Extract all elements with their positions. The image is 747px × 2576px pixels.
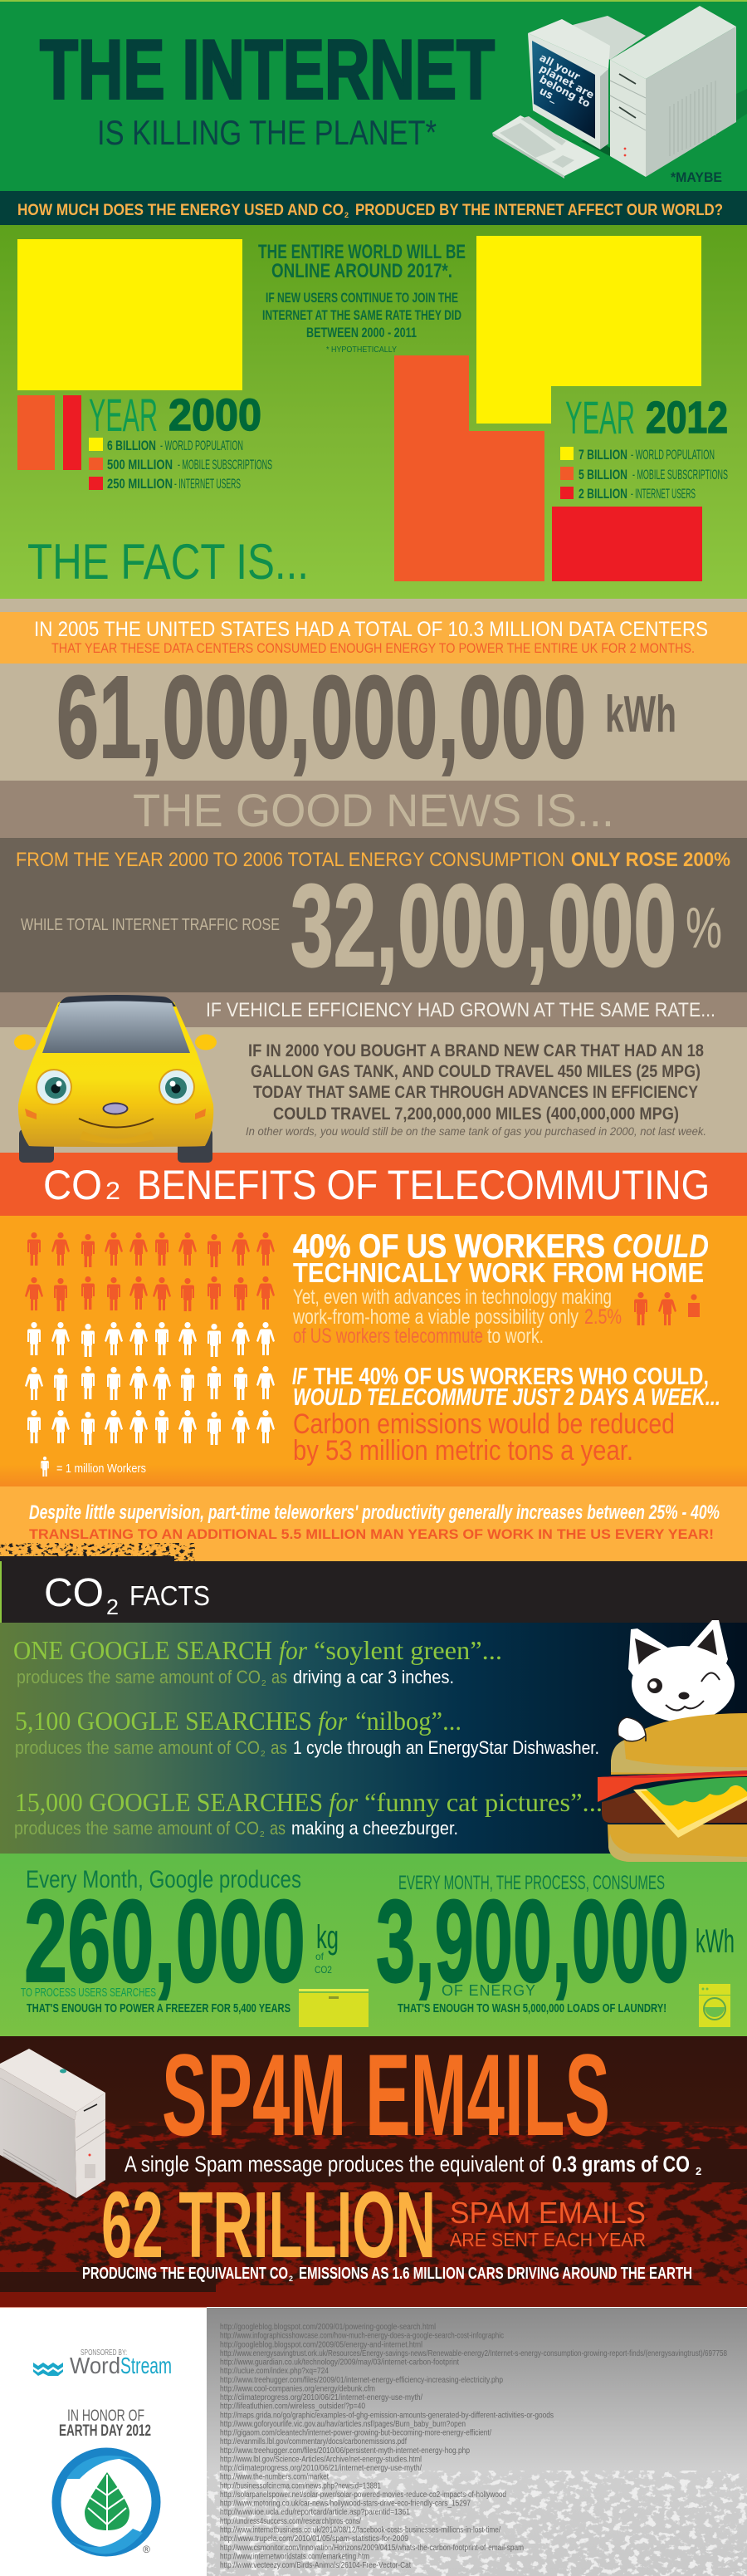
big number: 260,000 kg: kg [316, 1919, 339, 1956]
fact: soylent green: “soylent green”... [314, 1635, 502, 1665]
heading: if workers telecommute: IF [292, 1364, 308, 1390]
text block: only 2.5 percent telecommute: to work. [487, 1325, 544, 1348]
heading: 40 percent could work from home [293, 1228, 709, 1288]
panel: google monthly stats: TO PROCESS USERS SEARCHES [21, 1986, 156, 2000]
text block: entire world online: INTERNET AT THE SAME RATE THEY DID [262, 307, 461, 323]
panel: energy vs traffic: WHILE TOTAL INTERNET TRAFFIC ROSE [21, 916, 280, 934]
panel: energy vs traffic: ONLY ROSE 200% [571, 849, 730, 871]
heading: the good news is: THE GOOD NEWS IS... [133, 784, 614, 836]
chart: year 2000 squares [17, 239, 242, 470]
heading: 40 percent could work from home: 40% OF US WORKERS [293, 1228, 605, 1265]
big number: 62 trillion: 62 TRILLION [101, 2172, 436, 2277]
panel: car efficiency text: In other words, you would still be on the same tank of gas you purchased in 2000, not last week. [246, 1124, 706, 1138]
legend: year 2000: 500 MILLION [107, 457, 173, 473]
fact: nilbog: “nilbog”... [355, 1706, 461, 1736]
text block: source urls: http://www.internetworldstats.com/emarketing.htm [220, 2552, 369, 2561]
heading: 40 percent could work from home: TECHNICALLY WORK FROM HOME [293, 1257, 704, 1288]
fact: soylent green: 2 [261, 1679, 266, 1688]
footnote: maybe: *MAYBE [671, 169, 722, 185]
text block: source urls: http://www.lbl.gov/Science-Articles/Archive/net-energy-studies.html [220, 2455, 422, 2465]
text block: source urls: http://evanmills.lbl.gov/commentary/docs/carbonemissions.pdf [220, 2437, 407, 2446]
fact: nilbog [15, 1706, 599, 1759]
big number: 260,000 kg: of [315, 1951, 325, 1962]
panel: google monthly stats: THAT'S ENOUGH TO POWER A FREEZER FOR 5,400 YEARS [27, 2001, 290, 2015]
text block: entire world online: THE ENTIRE WORLD WILL BE [258, 241, 466, 263]
big number: kWh: kWh [605, 686, 676, 743]
fact: nilbog: for [318, 1706, 348, 1736]
text block: equivalent emissions: 2 [289, 2275, 293, 2283]
text block: single spam message: 0.3 grams of CO [552, 2152, 690, 2177]
text block: carbon emissions reduced [293, 1408, 675, 1467]
fact: funny cat pictures: “funny cat pictures”... [364, 1787, 603, 1817]
fact: funny cat pictures: produces the same amount of CO [14, 1818, 259, 1839]
title: THE INTERNET [40, 23, 495, 116]
heading: co2 facts [0, 1561, 747, 1623]
text block: spam emails sent each year [450, 2196, 646, 2250]
text block: only 2.5 percent telecommute [292, 1286, 622, 1348]
question banner [0, 191, 747, 225]
text block: entire world online [258, 241, 466, 355]
panel: productivity [0, 1486, 747, 1561]
text block: source urls: http://maps.grida.no/go/graphic/examples-of-ghg-emission-amounts-generated-by-different-activities-or-goods [220, 2411, 554, 2420]
panel: sponsor [0, 2308, 207, 2576]
text block: single spam message: 2 [696, 2165, 701, 2177]
text block: source urls: http://www.trupela.com/2010/01/05/spam-statistics-for-2009 [220, 2534, 408, 2544]
panel: google search facts [0, 1623, 747, 1854]
text block: source urls: http://solarpanelspower.net/solar-pwer/solar-powered-movies-reduce-co2-impacts-of-hollywood [220, 2490, 506, 2500]
illustration: smiling yellow car [14, 995, 217, 1163]
logo: earth day leaf: ® [143, 2544, 150, 2555]
text block: single spam message: A single Spam message produces the equivalent of [124, 2152, 544, 2177]
text block: source urls: http://gigaom.com/cleantech/internet-power-growing-but-becoming-more-energy-efficient/ [220, 2429, 491, 2438]
fact: funny cat pictures: making a cheezburger. [291, 1818, 458, 1839]
legend: year 2012: 5 BILLION [579, 467, 627, 482]
fact: nilbog: 1 cycle through an EnergyStar Dishwasher. [293, 1737, 599, 1758]
heading: year 2012: YEAR [565, 391, 635, 443]
illustration: server tower [0, 2049, 105, 2198]
panel: google monthly stats: OF ENERGY [442, 1982, 535, 1999]
panel: car efficiency text [0, 1027, 747, 1153]
text block: spam emails sent each year: ARE SENT EACH YEAR [450, 2229, 646, 2250]
text block: entire world online: BETWEEN 2000 - 2011 [306, 325, 417, 340]
legend: one million workers: = 1 million Workers [56, 1462, 146, 1476]
icon: desktop computer: planet are [538, 61, 597, 101]
pictogram: orange workers [25, 1232, 275, 1311]
heading: co2 facts: 2 [106, 1594, 119, 1619]
legend: one million workers [41, 1457, 146, 1477]
legend: year 2000: - MOBILE SUBSCRIPTIONS [178, 457, 272, 473]
callout: data centers banner [0, 612, 747, 664]
legend: year 2012 [560, 447, 728, 502]
text block: source urls: http://www.vecteezy.com/Birds-Animals/26104-Free-Vector-Cat [220, 2561, 411, 2570]
text block: source urls: http://www.goforyourlife.vic.gov.au/hav/articles.nsf/pages/Burn_baby_burn?open [220, 2420, 466, 2429]
text block: carbon emissions reduced: Carbon emissions would be reduced [293, 1408, 675, 1440]
fact: soylent green: driving a car 3 inches. [293, 1667, 454, 1687]
fact: funny cat pictures: as [270, 1818, 286, 1839]
text block: source urls: http://www.csmonitor.com/Innovation/Horizons/2009/0415/whats-the-carbon-footprint-of-email-spam [220, 2544, 524, 2553]
heading: year 2012: 2012 [646, 393, 728, 443]
big number: traffic: % [686, 895, 722, 960]
fact: funny cat pictures: 15,000 GOOGLE SEARCHES [15, 1787, 323, 1817]
text block: entire world online: IF NEW USERS CONTINUE TO JOIN THE [266, 290, 458, 306]
panel: sponsor: IN HONOR OF [67, 2407, 144, 2425]
text block: source urls: http://climateprogress.org/2010/06/21/internet-energy-use-myth/ [220, 2393, 422, 2402]
legend: year 2000: - INTERNET USERS [174, 476, 241, 492]
icon: freezer [299, 1989, 369, 2027]
heading: if workers telecommute [292, 1364, 720, 1411]
fact: soylent green: produces the same amount of CO [17, 1667, 261, 1687]
panel: google monthly stats [0, 1854, 747, 2036]
logo: wordstream [33, 2353, 172, 2378]
big number: 260,000 kg: CO2 [315, 1964, 332, 1976]
fact: soylent green [13, 1635, 502, 1688]
legend: year 2012: 7 BILLION [579, 447, 627, 463]
icon: desktop computer [492, 6, 747, 179]
legend: year 2000: - WORLD POPULATION [160, 438, 243, 453]
text block: source urls: http://www.the-numbers.com/market [220, 2473, 329, 2482]
text block: source urls: http://googleblog.blogspot.com/2009/05/energy-and-internet.html [220, 2340, 422, 2349]
banner: co2 benefits of telecommuting [0, 1153, 747, 1216]
text block: entire world online: ONLINE AROUND 2017*. [271, 260, 452, 282]
text block: equivalent emissions: PRODUCING THE EQUIVALENT CO [82, 2265, 288, 2283]
fact: nilbog: 5,100 GOOGLE SEARCHES [15, 1706, 312, 1736]
icon: desktop computer: belong to [538, 72, 593, 110]
fact: soylent green: for [279, 1635, 307, 1665]
text block: only 2.5 percent telecommute: of US workers telecommute [293, 1325, 483, 1348]
text block: source urls: http://www.internetbusiness.co.uk/2010/08/12/facebook-costs-businesses-millions-in-lost-time/ [220, 2526, 500, 2534]
panel: sponsor: SPONSORED BY: [81, 2348, 127, 2358]
panel: telecommuting workers [0, 1216, 747, 1486]
text block: carbon emissions reduced: by 53 million metric tons a year. [293, 1435, 633, 1467]
banner: vehicle efficiency [0, 992, 747, 1027]
legend: year 2000: 6 BILLION [107, 438, 156, 453]
illustration: cat on cheeseburger [598, 1620, 747, 1862]
fact: nilbog: 2 [261, 1750, 266, 1759]
pictogram: 2.5 workers [634, 1292, 700, 1325]
text block: source urls: http://www.treehugger.com/files/2010/06/persistent-myth-internet-energy-hog.php [220, 2446, 470, 2456]
panel: google monthly stats: Every Month, Google produces [26, 1866, 301, 1893]
fact: nilbog: produces the same amount of CO [15, 1737, 260, 1758]
text block: entire world online: * HYPOTHETICALLY [326, 345, 397, 355]
pictogram: white workers [25, 1322, 275, 1445]
legend: year 2000: 250 MILLION [107, 476, 173, 492]
panel: sources [207, 2308, 747, 2576]
panel: energy vs traffic: FROM THE YEAR 2000 TO 2006 TOTAL ENERGY CONSUMPTION [16, 849, 564, 871]
heading: co2 facts: FACTS [129, 1580, 210, 1611]
text block: only 2.5 percent telecommute: 2.5% [584, 1305, 622, 1329]
text block: source urls: http://www.ioe.ucla.edu/reportcard/article.asp?parentid=1361 [220, 2508, 410, 2517]
panel: sponsor: EARTH DAY 2012 [59, 2422, 151, 2440]
text block: source urls: http://lifeatluthien.com/wireless_outsider/?p=40 [220, 2402, 365, 2412]
heading: year 2000: 2000 [168, 390, 261, 440]
fact: funny cat pictures: for [329, 1787, 359, 1817]
legend: year 2000 [89, 438, 272, 492]
fact: soylent green: as [271, 1667, 287, 1687]
big number: 260,000 kg: 260,000 [24, 1875, 305, 2006]
banner: co2 benefits of telecommuting: CO [43, 1162, 102, 1208]
text block: only 2.5 percent telecommute: work-from-home a viable possibility only [292, 1305, 579, 1329]
text block: source urls: http://climateprogress.org/2010/06/21/internet-energy-use-myth/ [220, 2464, 422, 2473]
panel: spam emails [0, 2030, 747, 2308]
heading: the good news is [0, 781, 747, 838]
chart: year 2012 shapes [394, 236, 702, 581]
text block: source urls: http://www.guardian.co.uk/technology/2009/may/03/internet-carbon-footprint [220, 2358, 459, 2367]
fact: nilbog: as [271, 1737, 287, 1758]
panel: internet users comparison [0, 225, 747, 599]
fact: funny cat pictures: 2 [260, 1830, 265, 1839]
icon: desktop computer: all your [538, 51, 583, 83]
logo: wordstream: Word [70, 2353, 120, 2378]
text block: source urls: http://undress4success.com/research/pros-cons/ [220, 2517, 361, 2526]
text block: equivalent emissions [82, 2265, 692, 2283]
heading: year 2000: YEAR [89, 389, 158, 441]
panel: car efficiency text: COULD TRAVEL 7,200,000,000 MILES (400,000,000 MPG) [273, 1104, 679, 1124]
question banner: 2 [344, 211, 349, 219]
heading: co2 facts: CO [44, 1571, 104, 1615]
text block: only 2.5 percent telecommute: Yet, even with advances in technology making [293, 1286, 612, 1309]
icon: desktop computer: us_ [537, 84, 560, 105]
heading: the fact is: THE FACT IS... [27, 534, 309, 590]
banner: co2 benefits of telecommuting: 2 [105, 1178, 120, 1205]
text block: source urls: http://www.treehugger.com/files/2009/01/internet-energy-efficiency-increasing-electricity.php [220, 2376, 503, 2385]
panel: energy vs traffic [0, 838, 747, 992]
legend: year 2012: 2 BILLION [579, 486, 627, 502]
text block: source urls: http://www.motoring.co.uk/car-news/hollywood-stars-drive-eco-friendly-cars_15297 [220, 2500, 471, 2509]
text block: source urls: http://www.cool-companies.org/energy/debunk.cfm [220, 2384, 375, 2393]
panel: data centers [0, 599, 747, 782]
text block: source urls: http://www.infographicsshowcase.com/how-much-energy-does-a-google-search-cost-infographic [220, 2332, 504, 2341]
text block: source urls: http://businessofcinema.com/news.php?newsid=13881 [220, 2481, 381, 2490]
subtitle: IS KILLING THE PLANET* [97, 113, 437, 152]
logo: wordstream: Stream [120, 2353, 172, 2378]
text block: source urls: http://googleblog.blogspot.com/2009/01/powering-google-search.html [220, 2323, 436, 2332]
fact: soylent green: ONE GOOGLE SEARCH [13, 1635, 272, 1665]
text block: source urls: http://uclue.com/index.php?xq=724 [220, 2367, 329, 2376]
text block: source urls [220, 2323, 727, 2570]
panel: header [0, 0, 747, 191]
heading: 40 percent could work from home: COULD [613, 1228, 709, 1265]
icon: washing machine [699, 1984, 730, 2027]
question banner: HOW MUCH DOES THE ENERGY USED AND CO [17, 202, 344, 219]
panel: google monthly stats: THAT'S ENOUGH TO WASH 5,000,000 LOADS OF LAUNDRY! [398, 2001, 666, 2015]
panel: productivity: TRANSLATING TO AN ADDITIONAL 5.5 MILLION MAN YEARS OF WORK IN THE US EVERY YEAR! [29, 1526, 714, 1542]
text block: spam emails sent each year: SPAM EMAILS [450, 2196, 646, 2230]
logo: earth day leaf [56, 2452, 156, 2555]
fact: funny cat pictures [14, 1787, 603, 1839]
